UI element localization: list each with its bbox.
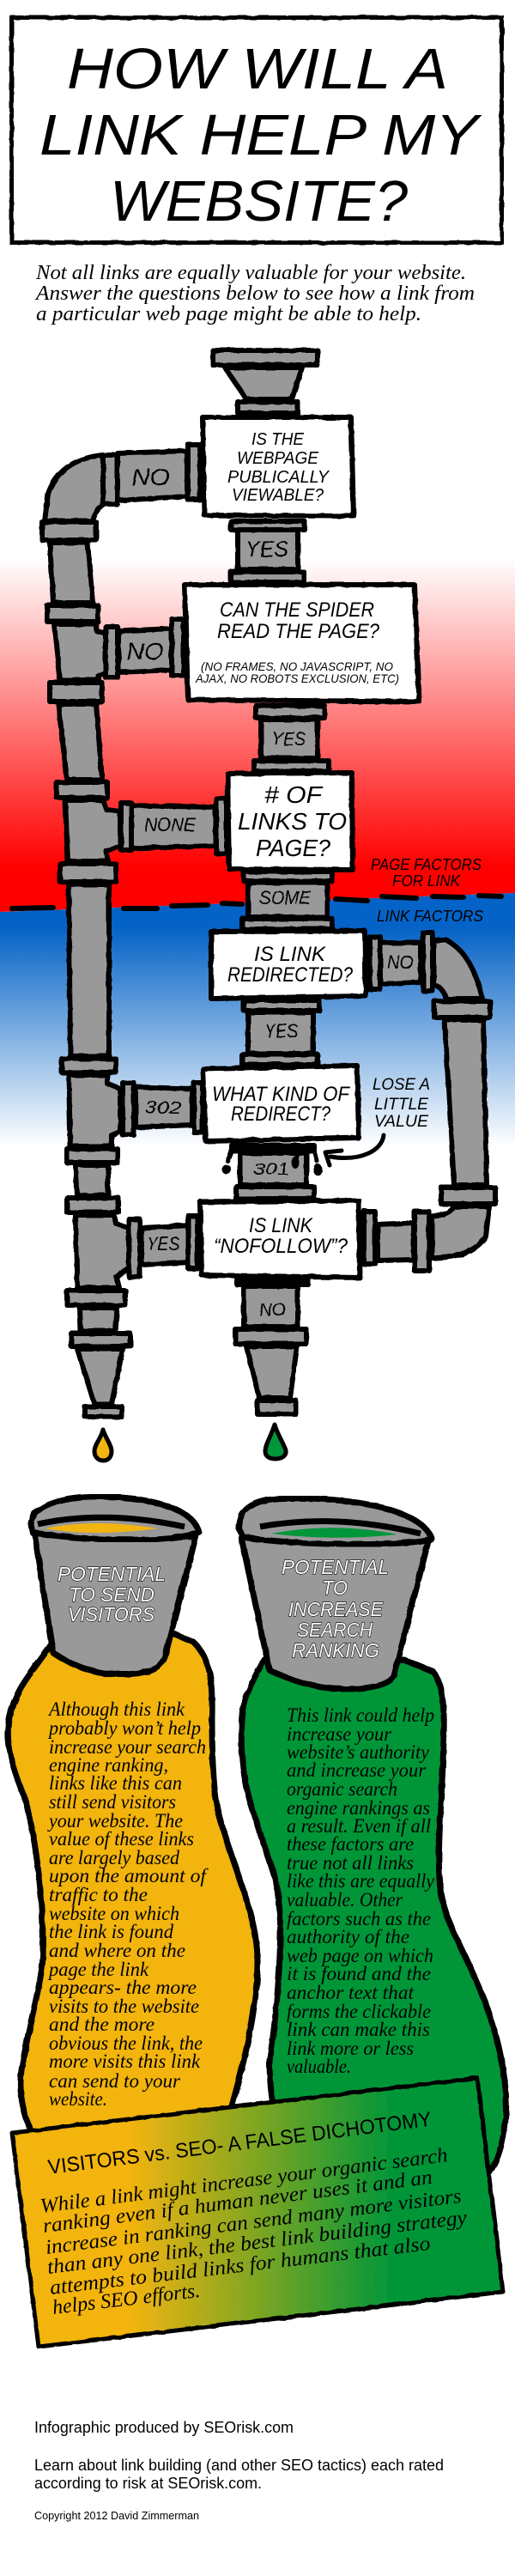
question box: publically viewable: IS THE	[251, 430, 305, 449]
title text	[39, 37, 482, 234]
orange blob text: probably won’t help	[47, 1717, 201, 1739]
question box: is link nofollow: “NOFOLLOW”?	[214, 1235, 348, 1258]
icon: left bucket	[31, 1497, 199, 1674]
question box: what kind of redirect: REDIRECT?	[231, 1103, 331, 1126]
label: 302	[145, 1098, 181, 1118]
label: NO	[126, 638, 164, 665]
green blob text: and increase your	[287, 1759, 427, 1781]
panel body text: increase in ranking can send many more visitors	[45, 2185, 463, 2259]
question box: number of links: # OF	[264, 781, 324, 808]
footer credits: according to risk at SEOrisk.com.	[34, 2475, 262, 2492]
orange blob text: Although this link	[47, 1698, 185, 1720]
orange blob text: increase your search	[49, 1736, 206, 1758]
funnel inlet	[213, 350, 318, 413]
orange blob text: and the more	[49, 2014, 154, 2035]
orange blob text: obvious the link, the	[49, 2032, 203, 2054]
label: SOME	[259, 887, 311, 908]
question box: publically viewable: PUBLICALLY	[227, 468, 330, 487]
orange blob text: your website. The	[47, 1810, 183, 1832]
pipe: SOME	[242, 872, 332, 929]
label: 301	[253, 1161, 289, 1179]
question box: publically viewable: WEBPAGE	[237, 449, 319, 468]
green blob text: valuable.	[287, 2056, 351, 2077]
icon: green drop	[265, 1425, 286, 1459]
orange blob text: website.	[49, 2088, 107, 2110]
pipe: third YES	[242, 1000, 319, 1065]
label: page factors for link: FOR LINK	[392, 872, 461, 890]
icon: orange drop	[94, 1430, 112, 1461]
title box	[12, 17, 501, 242]
label: NO	[387, 951, 413, 973]
panel body text: than any one link, the best link building strategy	[46, 2207, 469, 2279]
green blob text: forms the clickable	[287, 2001, 431, 2022]
green blob text: authority of the	[287, 1926, 409, 1947]
bucket label: SEARCH	[297, 1619, 373, 1641]
question box: is link redirected	[211, 931, 366, 999]
label: page factors for link	[371, 856, 482, 890]
panel: visitors vs SEO false dichotomy	[12, 2078, 503, 2347]
right outlet pipe	[235, 1279, 308, 1414]
bucket label	[58, 1563, 166, 1625]
bucket label: TO SEND	[69, 1583, 154, 1606]
question box: can the spider read: CAN THE SPIDER	[220, 598, 374, 622]
green blob text: these factors are	[287, 1833, 414, 1855]
green blob text: valuable. Other	[287, 1889, 403, 1911]
bucket label: POTENTIAL	[58, 1563, 166, 1585]
green blob text: anchor text that	[287, 1982, 415, 2003]
footer credits	[34, 2419, 444, 2522]
intro text	[34, 262, 475, 325]
pipe: NO loop on right	[364, 933, 495, 1271]
footer credits: Learn about link building (and other SEO tactics) each rated	[34, 2457, 444, 2474]
question box: number of links: PAGE?	[256, 835, 330, 861]
orange blob text: and where on the	[49, 1940, 185, 1961]
panel body text: attempts to build links for humans that also	[49, 2233, 432, 2300]
orange blob text: engine ranking,	[49, 1754, 168, 1776]
green blob text: web page on which	[287, 1945, 433, 1966]
title text: LINK HELP MY	[39, 103, 482, 167]
title text: WEBSITE?	[110, 169, 409, 234]
question box: can the spider read: (NO FRAMES, NO JAVASCRIPT, NO	[201, 659, 393, 673]
green blob text: true not all links	[287, 1852, 414, 1874]
question box: can the spider read	[185, 585, 419, 702]
orange blob text: can send to your	[49, 2070, 181, 2092]
question box: what kind of redirect	[203, 1066, 359, 1141]
panel body text: ranking even if a human never uses it and an	[41, 2166, 433, 2238]
orange blob text	[47, 1698, 209, 2110]
label: NO	[259, 1301, 286, 1320]
orange blob text: appears- the more	[49, 1977, 197, 1998]
label: page factors for link: PAGE FACTORS	[371, 856, 482, 873]
orange blob text: are largely based	[49, 1847, 179, 1868]
orange blob text: visits to the website	[49, 1996, 199, 2017]
orange blob text: upon the amount of	[49, 1865, 209, 1886]
pipe: NONE	[121, 799, 227, 854]
bucket label: POTENTIAL	[282, 1556, 389, 1578]
bucket label: RANKING	[292, 1639, 379, 1662]
label: NO	[131, 464, 170, 490]
orange blob text: more visits this link	[49, 2050, 201, 2072]
pipe: first NO	[103, 445, 200, 504]
bucket label: VISITORS	[68, 1603, 155, 1625]
label: link factors: LINK FACTORS	[377, 908, 483, 925]
pipe: second NO	[106, 619, 184, 677]
orange blob text: page the link	[47, 1959, 149, 1980]
pipe: YES to left drain	[129, 1216, 197, 1277]
question box: publically viewable: VIEWABLE?	[232, 486, 324, 505]
question box: can the spider read: READ THE PAGE?	[217, 620, 380, 643]
orange blob text: the link is found	[49, 1921, 173, 1942]
pipe: first YES	[231, 521, 305, 582]
green blob text: a result. Even if all	[287, 1815, 431, 1837]
background: link factors blue gradient	[0, 893, 515, 1146]
green blob text: link can make this	[287, 2019, 430, 2040]
panel: green search ranking blob	[241, 1660, 506, 2172]
question box: publically viewable	[203, 417, 354, 516]
pipe: 301 with leaking drips	[221, 1145, 322, 1199]
green blob text: increase your	[287, 1723, 392, 1745]
green blob text: engine rankings as	[287, 1797, 430, 1819]
orange blob text: still send visitors	[49, 1791, 176, 1813]
pipe: 302	[123, 1083, 203, 1135]
question box: number of links	[227, 773, 353, 870]
callout: lose a little value: LOSE A	[373, 1076, 430, 1094]
panel heading: VISITORS vs. SEO- A FALSE DICHOTOMY	[46, 2108, 433, 2179]
green blob text: organic search	[287, 1778, 397, 1800]
orange blob text: traffic to the	[49, 1884, 148, 1905]
pipe: second YES	[254, 706, 329, 771]
icon: right bucket	[239, 1498, 432, 1689]
bucket label	[282, 1556, 389, 1662]
bucket label: INCREASE	[288, 1598, 384, 1620]
footer credits: Infographic produced by SEOrisk.com	[34, 2419, 294, 2436]
leak drips	[221, 1151, 322, 1176]
question box: what kind of redirect: WHAT KIND OF	[212, 1083, 350, 1106]
bucket label: TO	[322, 1577, 348, 1599]
question box: is link redirected: IS LINK	[254, 943, 326, 966]
question box: can the spider read: AJAX, NO ROBOTS EXCLUSION, ETC)	[195, 671, 399, 685]
green blob text: website’s authority	[287, 1741, 430, 1763]
label: YES	[147, 1233, 179, 1255]
footer credits: Copyright 2012 David Zimmerman	[34, 2509, 199, 2522]
intro text: a particular web page might be able to help.	[36, 303, 421, 325]
label: YES	[245, 538, 288, 562]
panel body text	[39, 2144, 469, 2319]
panel body text: While a link might increase your organic search	[39, 2144, 449, 2218]
question box: is link redirected: REDIRECTED?	[227, 963, 354, 987]
intro text: Not all links are equally valuable for your website.	[35, 262, 466, 284]
callout: lose a little value: VALUE	[374, 1113, 428, 1131]
green blob text: link more or less	[287, 2038, 414, 2059]
question box: is link nofollow	[200, 1200, 360, 1278]
title text: HOW WILL A	[67, 37, 448, 101]
callout: lose a little value: LITTLE	[374, 1096, 428, 1114]
left drain pipe	[42, 455, 130, 1417]
question box: is link nofollow: IS LINK	[249, 1214, 313, 1237]
callout: lose a little value	[325, 1076, 430, 1165]
green blob text	[287, 1704, 435, 2077]
arrow	[325, 1135, 384, 1165]
orange blob text: value of these links	[49, 1828, 194, 1850]
green blob text: like this are equally	[287, 1870, 435, 1892]
label: YES	[272, 728, 306, 750]
label: YES	[264, 1020, 298, 1042]
label: NONE	[144, 814, 196, 835]
green blob text: it is found and the	[287, 1963, 431, 1984]
question box: number of links: LINKS TO	[238, 808, 347, 835]
green blob text: This link could help	[287, 1704, 434, 1726]
background: page factors red gradient	[0, 558, 515, 912]
orange blob text: website on which	[49, 1903, 179, 1924]
panel body text: helps SEO efforts.	[52, 2280, 202, 2319]
divider dashes between page factors and link factors	[12, 896, 501, 908]
green blob text: factors such as the	[287, 1908, 431, 1929]
orange blob text: links like this can	[49, 1772, 182, 1794]
panel: orange visitors blob	[8, 1633, 258, 2138]
intro text: Answer the questions below to see how a link from	[34, 283, 475, 305]
